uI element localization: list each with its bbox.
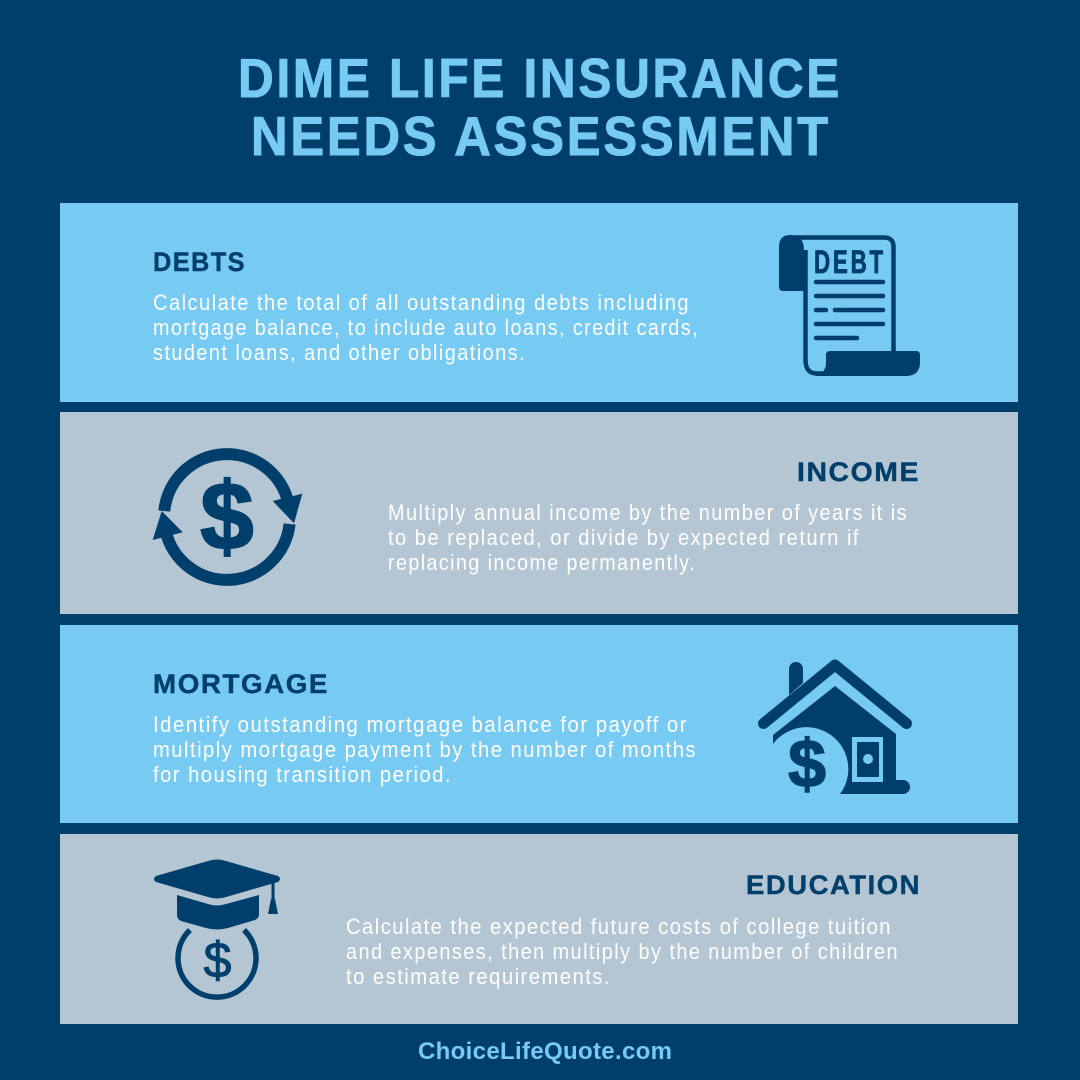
panel: education: [60, 834, 1018, 1024]
icon: graduation cap with dollar: $: [204, 932, 231, 988]
text block: education description: [346, 914, 899, 989]
icon: house with dollar: $: [788, 726, 826, 802]
text block: debts description: [153, 290, 699, 365]
text block: income description: to be replaced, or divide by expected return if: [388, 525, 860, 550]
panel: mortgage: [60, 625, 1018, 823]
heading: mortgage: MORTGAGE: [153, 669, 329, 699]
text block: income description: replacing income permanently.: [388, 550, 696, 575]
text block: mortgage description: Identify outstanding mortgage balance for payoff or: [153, 712, 688, 737]
text block: debts description: Calculate the total of all outstanding debts including: [153, 290, 690, 315]
icon: circular dollar arrows: $: [200, 463, 254, 570]
title: [238, 47, 842, 167]
text block: income description: [388, 500, 908, 575]
text block: income description: Multiply annual income by the number of years it is: [388, 500, 908, 525]
text block: mortgage description: multiply mortgage payment by the number of months: [153, 737, 697, 762]
text block: education description: to estimate requirements.: [346, 964, 611, 989]
heading: income: INCOME: [797, 457, 920, 487]
text block: mortgage description: [153, 712, 697, 787]
icon: house with dollar: [764, 662, 910, 802]
title: DIME LIFE INSURANCE: [238, 47, 842, 109]
icon: debt scroll: [779, 235, 920, 376]
text block: education description: and expenses, then multiply by the number of children: [346, 939, 899, 964]
panel: income: [60, 412, 1018, 614]
heading: debts: DEBTS: [153, 247, 246, 277]
text block: debts description: mortgage balance, to include auto loans, credit cards,: [153, 315, 699, 340]
text block: mortgage description: for housing transition period.: [153, 762, 452, 787]
panel: debts: [60, 203, 1018, 402]
heading: education: EDUCATION: [746, 870, 921, 900]
text block: debts description: student loans, and other obligations.: [153, 340, 526, 365]
icon: debt scroll: DEBT: [814, 244, 886, 280]
title: NEEDS ASSESSMENT: [251, 105, 831, 167]
text block: education description: Calculate the expected future costs of college tuition: [346, 914, 892, 939]
footer: website: ChoiceLifeQuote.com: [418, 1038, 672, 1065]
icon: circular dollar arrows: [153, 454, 302, 580]
icon: graduation cap with dollar: [154, 860, 280, 997]
